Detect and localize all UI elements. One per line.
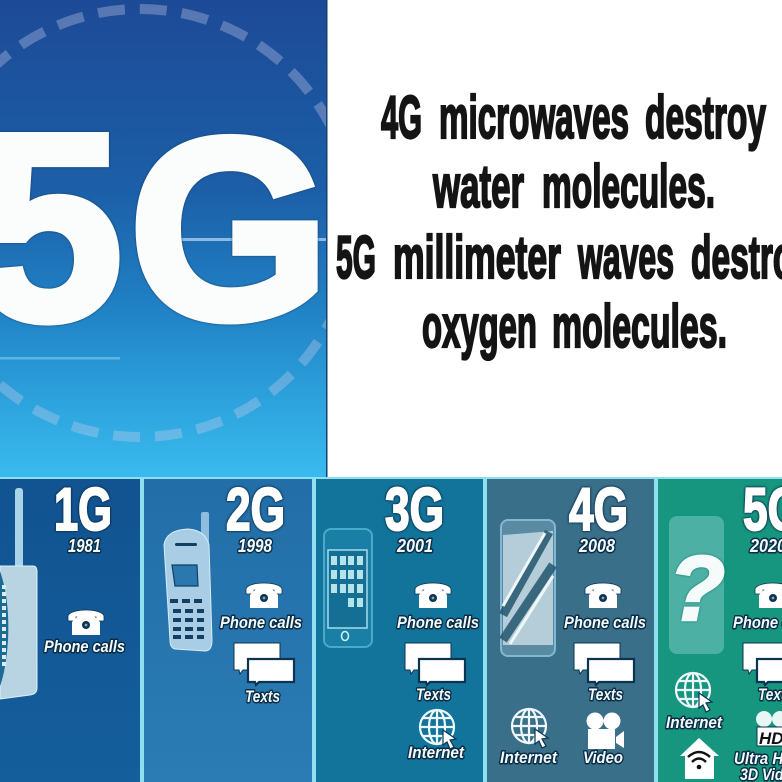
line 3: waves xyxy=(577,224,674,291)
heading: 4G: 4G xyxy=(569,476,628,543)
dashed signal ring xyxy=(0,4,326,442)
icon: globe xyxy=(676,673,712,712)
line 4 xyxy=(422,293,727,360)
year: 2008: 2008 xyxy=(578,536,615,556)
year: 2001: 2001 xyxy=(396,536,433,556)
label: phone calls: Phone calls xyxy=(397,613,479,632)
panel: 2G xyxy=(144,476,312,782)
question mark: ? xyxy=(669,538,725,640)
icon: texts xyxy=(234,643,294,685)
heading: 2G: 2G xyxy=(226,476,285,543)
line 3: millimeter xyxy=(393,224,561,291)
icon: globe xyxy=(512,709,548,748)
icon: 3G smartphone xyxy=(324,529,372,647)
label: internet: Internet xyxy=(666,713,723,732)
label: ultra HD 3D video xyxy=(734,749,782,782)
year: 1981: 1981 xyxy=(68,536,101,556)
label: phone calls: Phone calls xyxy=(220,613,302,632)
icon: texts xyxy=(743,643,782,685)
panel: claim text xyxy=(336,84,782,360)
panel: 5G xyxy=(658,476,782,782)
heading: 3G: 3G xyxy=(385,476,444,543)
icon: 1G brick phone xyxy=(0,488,37,699)
icon: globe xyxy=(420,710,456,749)
label: texts: Texts xyxy=(588,685,623,704)
line 2 xyxy=(432,153,715,220)
line 1: 4G xyxy=(381,84,422,151)
big 5G lettering xyxy=(0,79,330,376)
icon: HD camera xyxy=(756,711,782,748)
label: texts: Texts xyxy=(416,685,451,704)
line 4: oxygen xyxy=(422,293,537,360)
icon: video camera xyxy=(586,712,624,749)
icon: 2G candybar phone xyxy=(164,512,212,651)
label: phone calls: Phone calls xyxy=(44,637,125,656)
line 3 xyxy=(336,224,782,291)
label: texts: Texts xyxy=(245,687,280,706)
panel: 1G xyxy=(0,476,140,782)
line 2: water xyxy=(432,153,524,220)
label: phone calls: Phone calls xyxy=(564,613,646,632)
icon: phone xyxy=(415,583,451,608)
light streaks xyxy=(0,238,326,360)
year: 1998: 1998 xyxy=(238,536,272,556)
big 5G lettering: G xyxy=(129,84,330,373)
panel: generations strip backdrop xyxy=(0,477,782,782)
panel: 4G xyxy=(487,476,654,782)
panel: 3G xyxy=(316,476,483,782)
icon: phone xyxy=(246,583,282,608)
icon: phone xyxy=(585,583,621,608)
icon: texts xyxy=(574,643,634,685)
icon: 4G smartphone xyxy=(501,520,555,656)
icon: phone xyxy=(68,610,104,635)
line 1: microwaves xyxy=(439,84,629,151)
icon: 5G mystery phone xyxy=(669,516,725,654)
heading: 1G: 1G xyxy=(54,476,112,543)
icon: texts xyxy=(405,643,465,685)
label: internet: Internet xyxy=(500,748,558,767)
panel: 5G hero xyxy=(0,0,354,478)
icon: phone xyxy=(755,583,782,608)
label: internet: Internet xyxy=(408,743,465,762)
icon: smart home wifi xyxy=(680,738,719,779)
line 3: 5G xyxy=(336,224,376,291)
label: video: Video xyxy=(583,748,623,767)
